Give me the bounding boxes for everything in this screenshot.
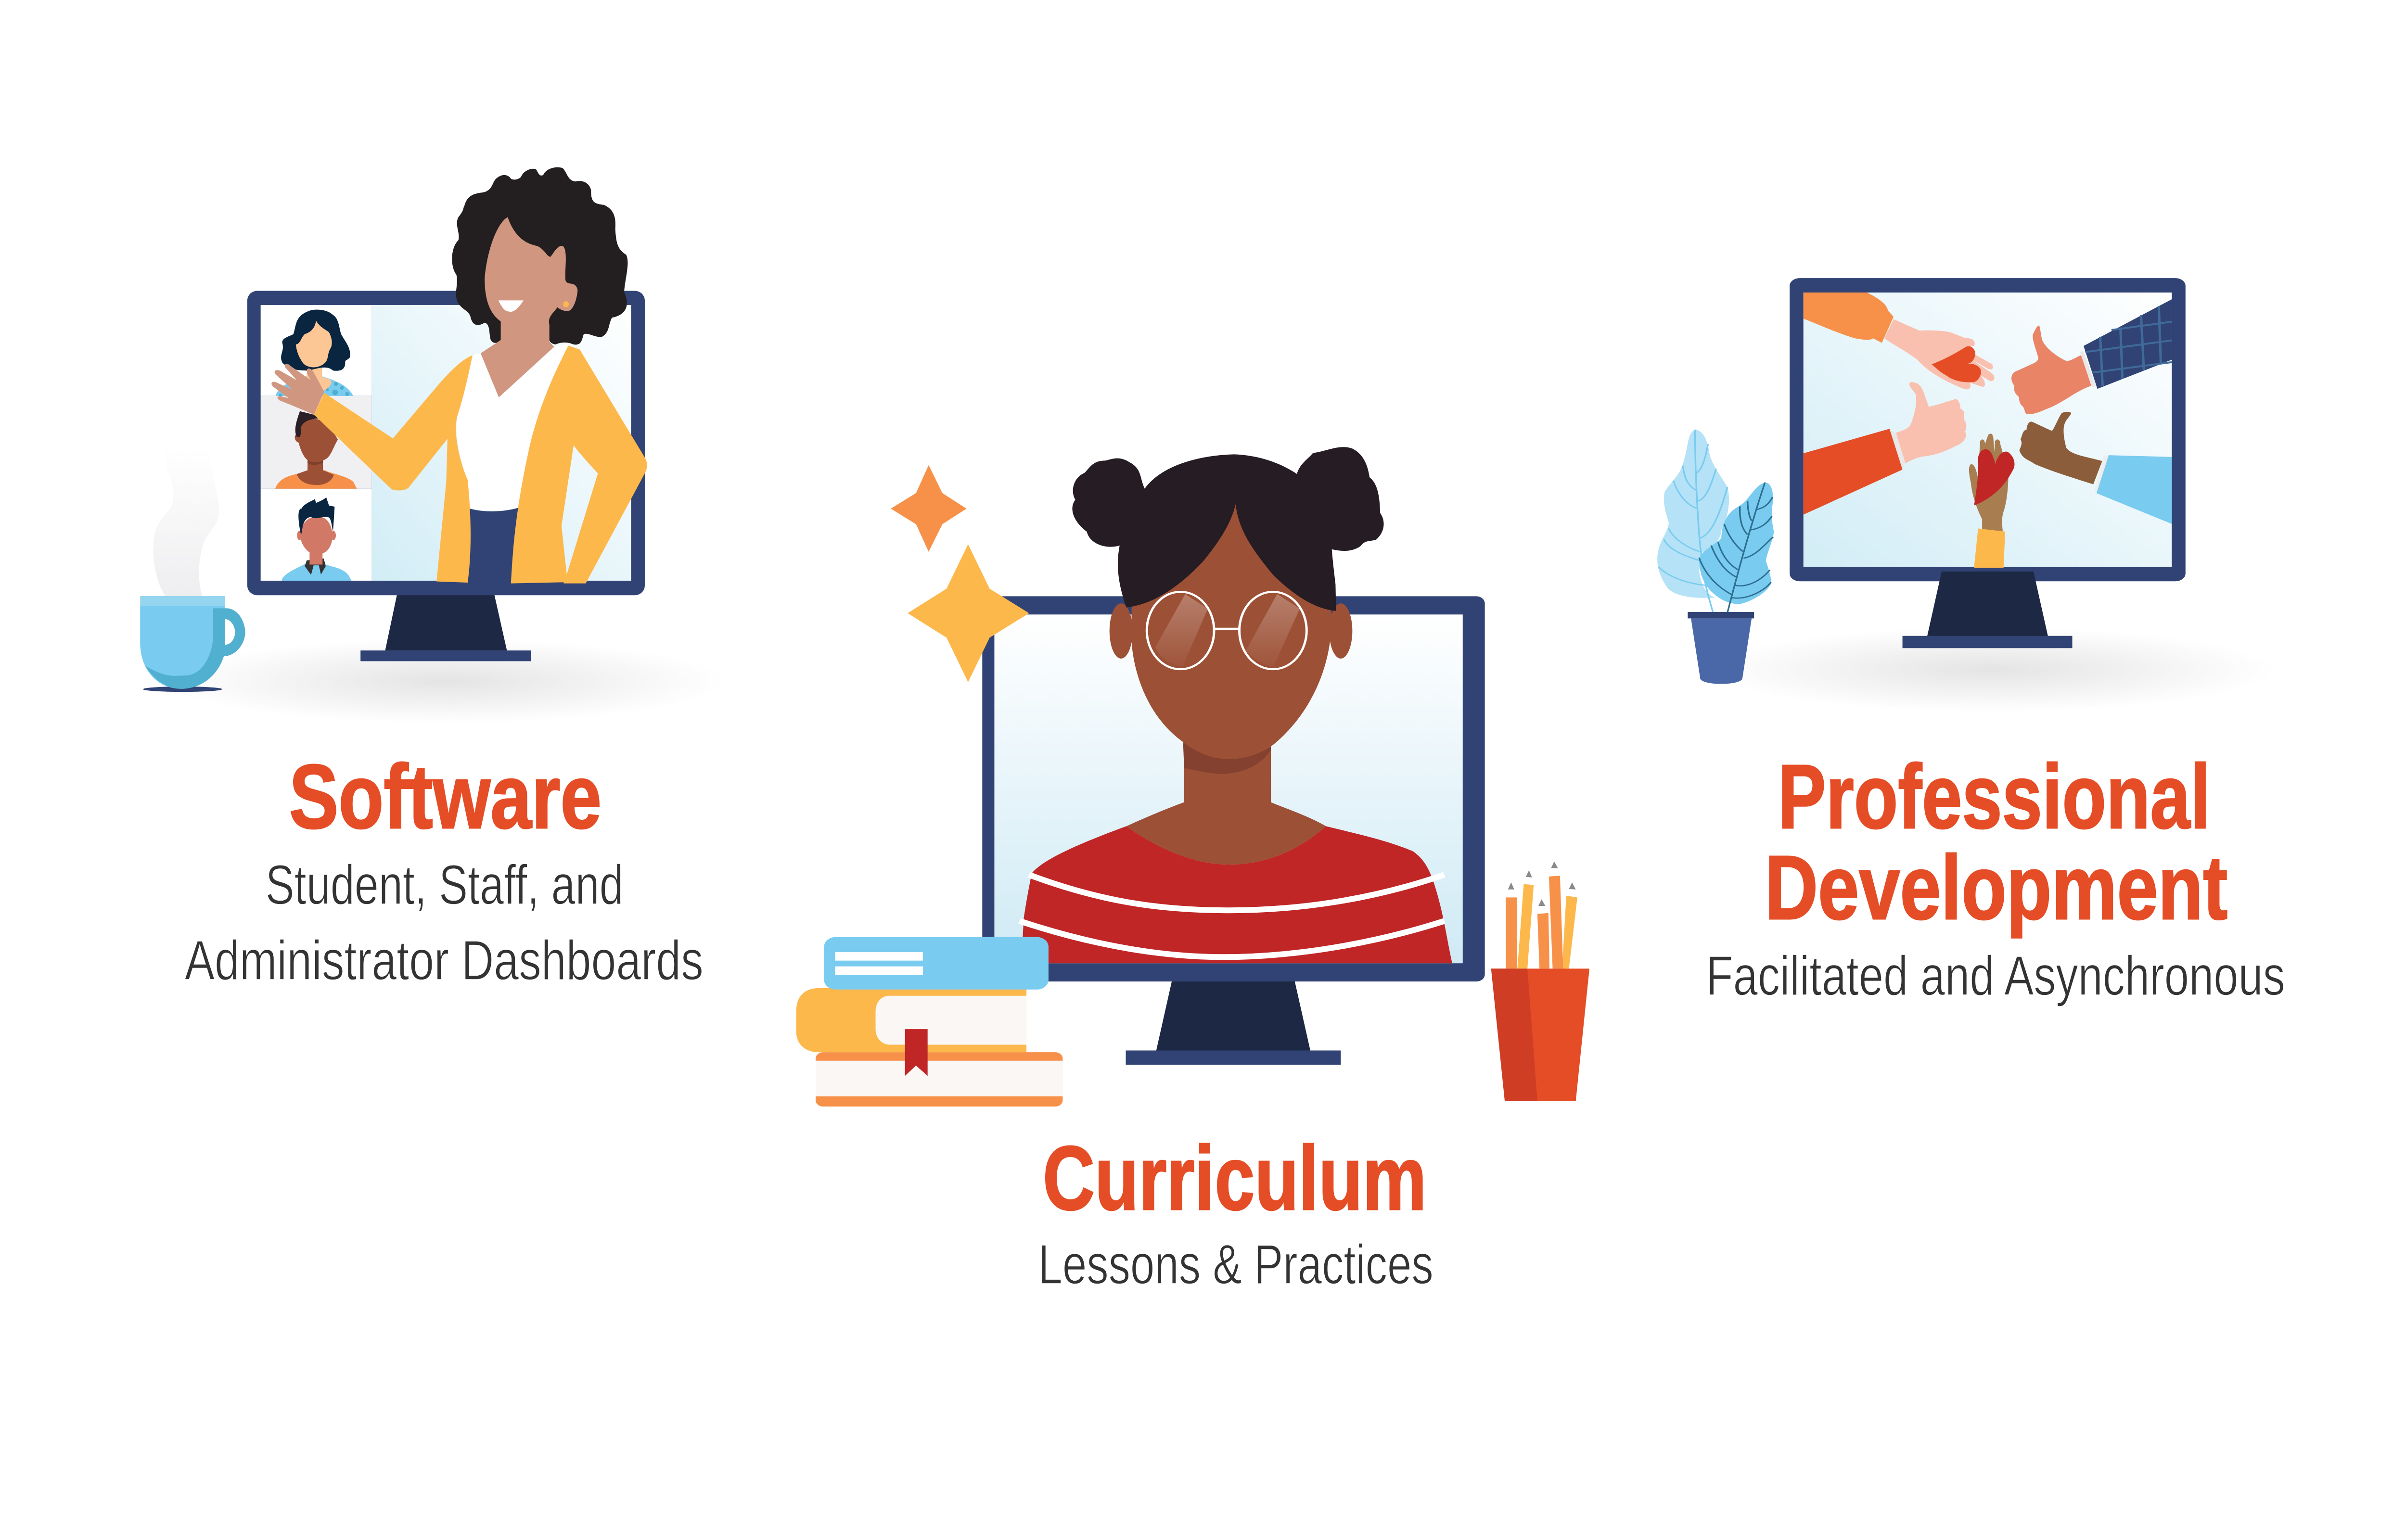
shirt stripes [1020, 875, 1445, 957]
icon: stack of books [796, 937, 1062, 1107]
earring [563, 301, 569, 307]
illustration: hands on monitor [1657, 278, 2275, 712]
heading: Professional Development: Development [1765, 837, 2227, 938]
teacher hair [452, 167, 627, 344]
glasses [1147, 592, 1306, 669]
chin shadow [1183, 742, 1271, 774]
teacher face [481, 217, 577, 397]
cardigan right [511, 345, 647, 584]
heading: Software: Software [289, 746, 602, 847]
illustration: teacher on video call [140, 167, 725, 723]
monitor stand [1126, 980, 1341, 1065]
text: software description: Administrator Dashboards [185, 929, 704, 992]
icon: steam [153, 447, 219, 596]
hand: thumbs up, red sleeve [1804, 382, 1966, 515]
shirt [1021, 826, 1452, 963]
teacher shirt [457, 344, 567, 511]
neck and chest [1126, 740, 1326, 865]
hair buns [1072, 447, 1384, 551]
floor shadow [167, 639, 725, 723]
panel: professional development [1657, 278, 2285, 1007]
student figure [1020, 447, 1452, 963]
panel: curriculum [796, 447, 1589, 1296]
monitor frame [247, 291, 645, 595]
screen [261, 305, 631, 581]
heading: Curriculum: Curriculum [1043, 1127, 1427, 1229]
text: software description: Student, Staff, and [266, 854, 624, 916]
hand: open palm with heart [1804, 293, 1995, 389]
text: software description [185, 854, 704, 992]
icon: pencil cup [1491, 861, 1589, 1101]
ears [1110, 603, 1352, 659]
screen [994, 614, 1463, 963]
monitor frame [982, 596, 1485, 981]
teacher figure [271, 167, 647, 584]
waving hand [271, 364, 324, 415]
hand: raised with heart [1969, 433, 2014, 568]
text: professional development description: Facilitated and Asynchronous [1706, 945, 2285, 1007]
face [1132, 486, 1331, 759]
monitor stand [1903, 572, 2072, 648]
heading: Professional Development [1765, 746, 2227, 938]
screen [1804, 293, 2172, 567]
video participant: man in blue [282, 497, 351, 581]
smile [499, 300, 524, 312]
panel: software [140, 167, 725, 992]
cardigan left [314, 355, 473, 583]
skirt [468, 508, 518, 584]
icon: potted plant [1657, 430, 1774, 684]
icon: orange sparkle [891, 465, 967, 552]
text: curriculum description: Lessons & Practices [1038, 1234, 1433, 1296]
hand: thumbs up, plaid sleeve [2011, 299, 2172, 414]
video participant: woman [276, 310, 353, 396]
icon: coffee cup [140, 596, 245, 692]
icon: yellow sparkle [908, 544, 1029, 682]
hand: thumbs up, blue sleeve [2019, 412, 2172, 524]
heading: Professional Development: Professional [1778, 746, 2210, 847]
illustration: student on monitor [796, 447, 1589, 1107]
monitor frame [1790, 278, 2186, 581]
monitor stand [360, 593, 531, 661]
hair [1118, 454, 1336, 611]
video participant: man in orange [275, 411, 357, 489]
floor shadow [1709, 628, 2275, 712]
